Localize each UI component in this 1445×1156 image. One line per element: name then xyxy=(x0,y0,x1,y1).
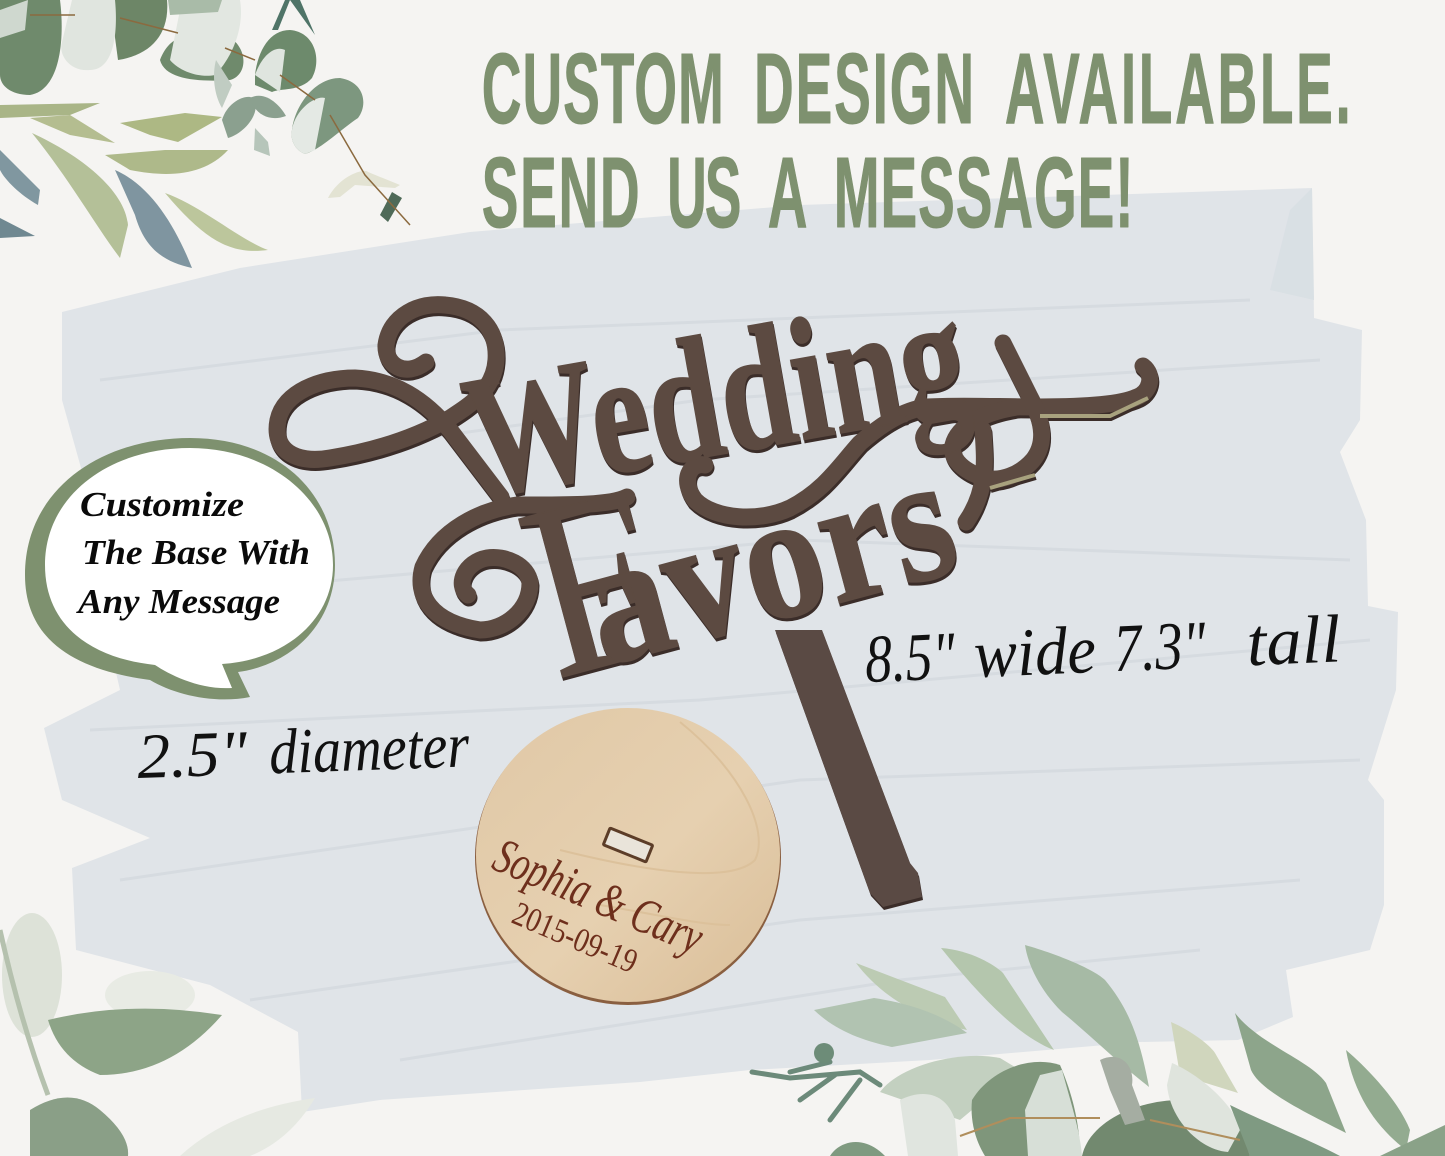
speech bubble xyxy=(25,438,335,699)
disc slot xyxy=(603,828,653,862)
topper swirls xyxy=(277,305,1150,630)
wood grain xyxy=(560,722,759,925)
title line 2 xyxy=(482,138,1134,249)
disc face xyxy=(476,708,780,1002)
wooden base disc xyxy=(475,708,781,1005)
engraved names: Sophia & Cary xyxy=(486,827,712,965)
dimension label: topper: tall xyxy=(1245,600,1342,680)
title line 2: SEND xyxy=(482,138,640,249)
title line 1: AVAILABLE. xyxy=(1005,34,1351,145)
dimension label: base: diameter xyxy=(268,709,471,787)
topper edge highlight xyxy=(990,398,1148,488)
engraved date: 2015-09-19 xyxy=(507,895,643,981)
title line 1: CUSTOM xyxy=(482,34,724,145)
title line 2: US xyxy=(667,138,741,249)
title line 2: MESSAGE! xyxy=(834,138,1134,249)
dimension label: topper: 7.3" xyxy=(1112,606,1208,686)
brush-stroke photo background xyxy=(44,188,1398,1112)
bubble text xyxy=(76,485,310,621)
dimension label: topper xyxy=(863,600,1342,697)
dimension label: base: 2.5" xyxy=(136,717,250,792)
foliage: bottom right xyxy=(752,945,1445,1156)
title line 1: DESIGN xyxy=(754,34,974,145)
wooden topper xyxy=(277,257,1150,907)
disc edge xyxy=(475,709,781,1005)
title line 2: A xyxy=(768,138,808,249)
topper stick xyxy=(775,630,922,907)
title line 1 xyxy=(482,34,1351,145)
dimension label: topper: wide xyxy=(972,611,1097,692)
topper word: Wedding: Wedding xyxy=(451,257,980,535)
bubble text: Customize xyxy=(80,485,244,524)
foliage: bottom left xyxy=(0,913,315,1156)
topper word: Favors: Favors xyxy=(498,355,978,732)
foliage: top left xyxy=(0,0,410,268)
bubble face xyxy=(45,448,333,688)
dimension label: topper: 8.5" xyxy=(863,617,957,697)
bubble shadow shape xyxy=(25,438,335,699)
title xyxy=(482,34,1351,249)
bubble text: Any Message xyxy=(76,582,280,621)
dimension label: base xyxy=(136,709,471,792)
bubble text: The Base With xyxy=(82,533,310,572)
